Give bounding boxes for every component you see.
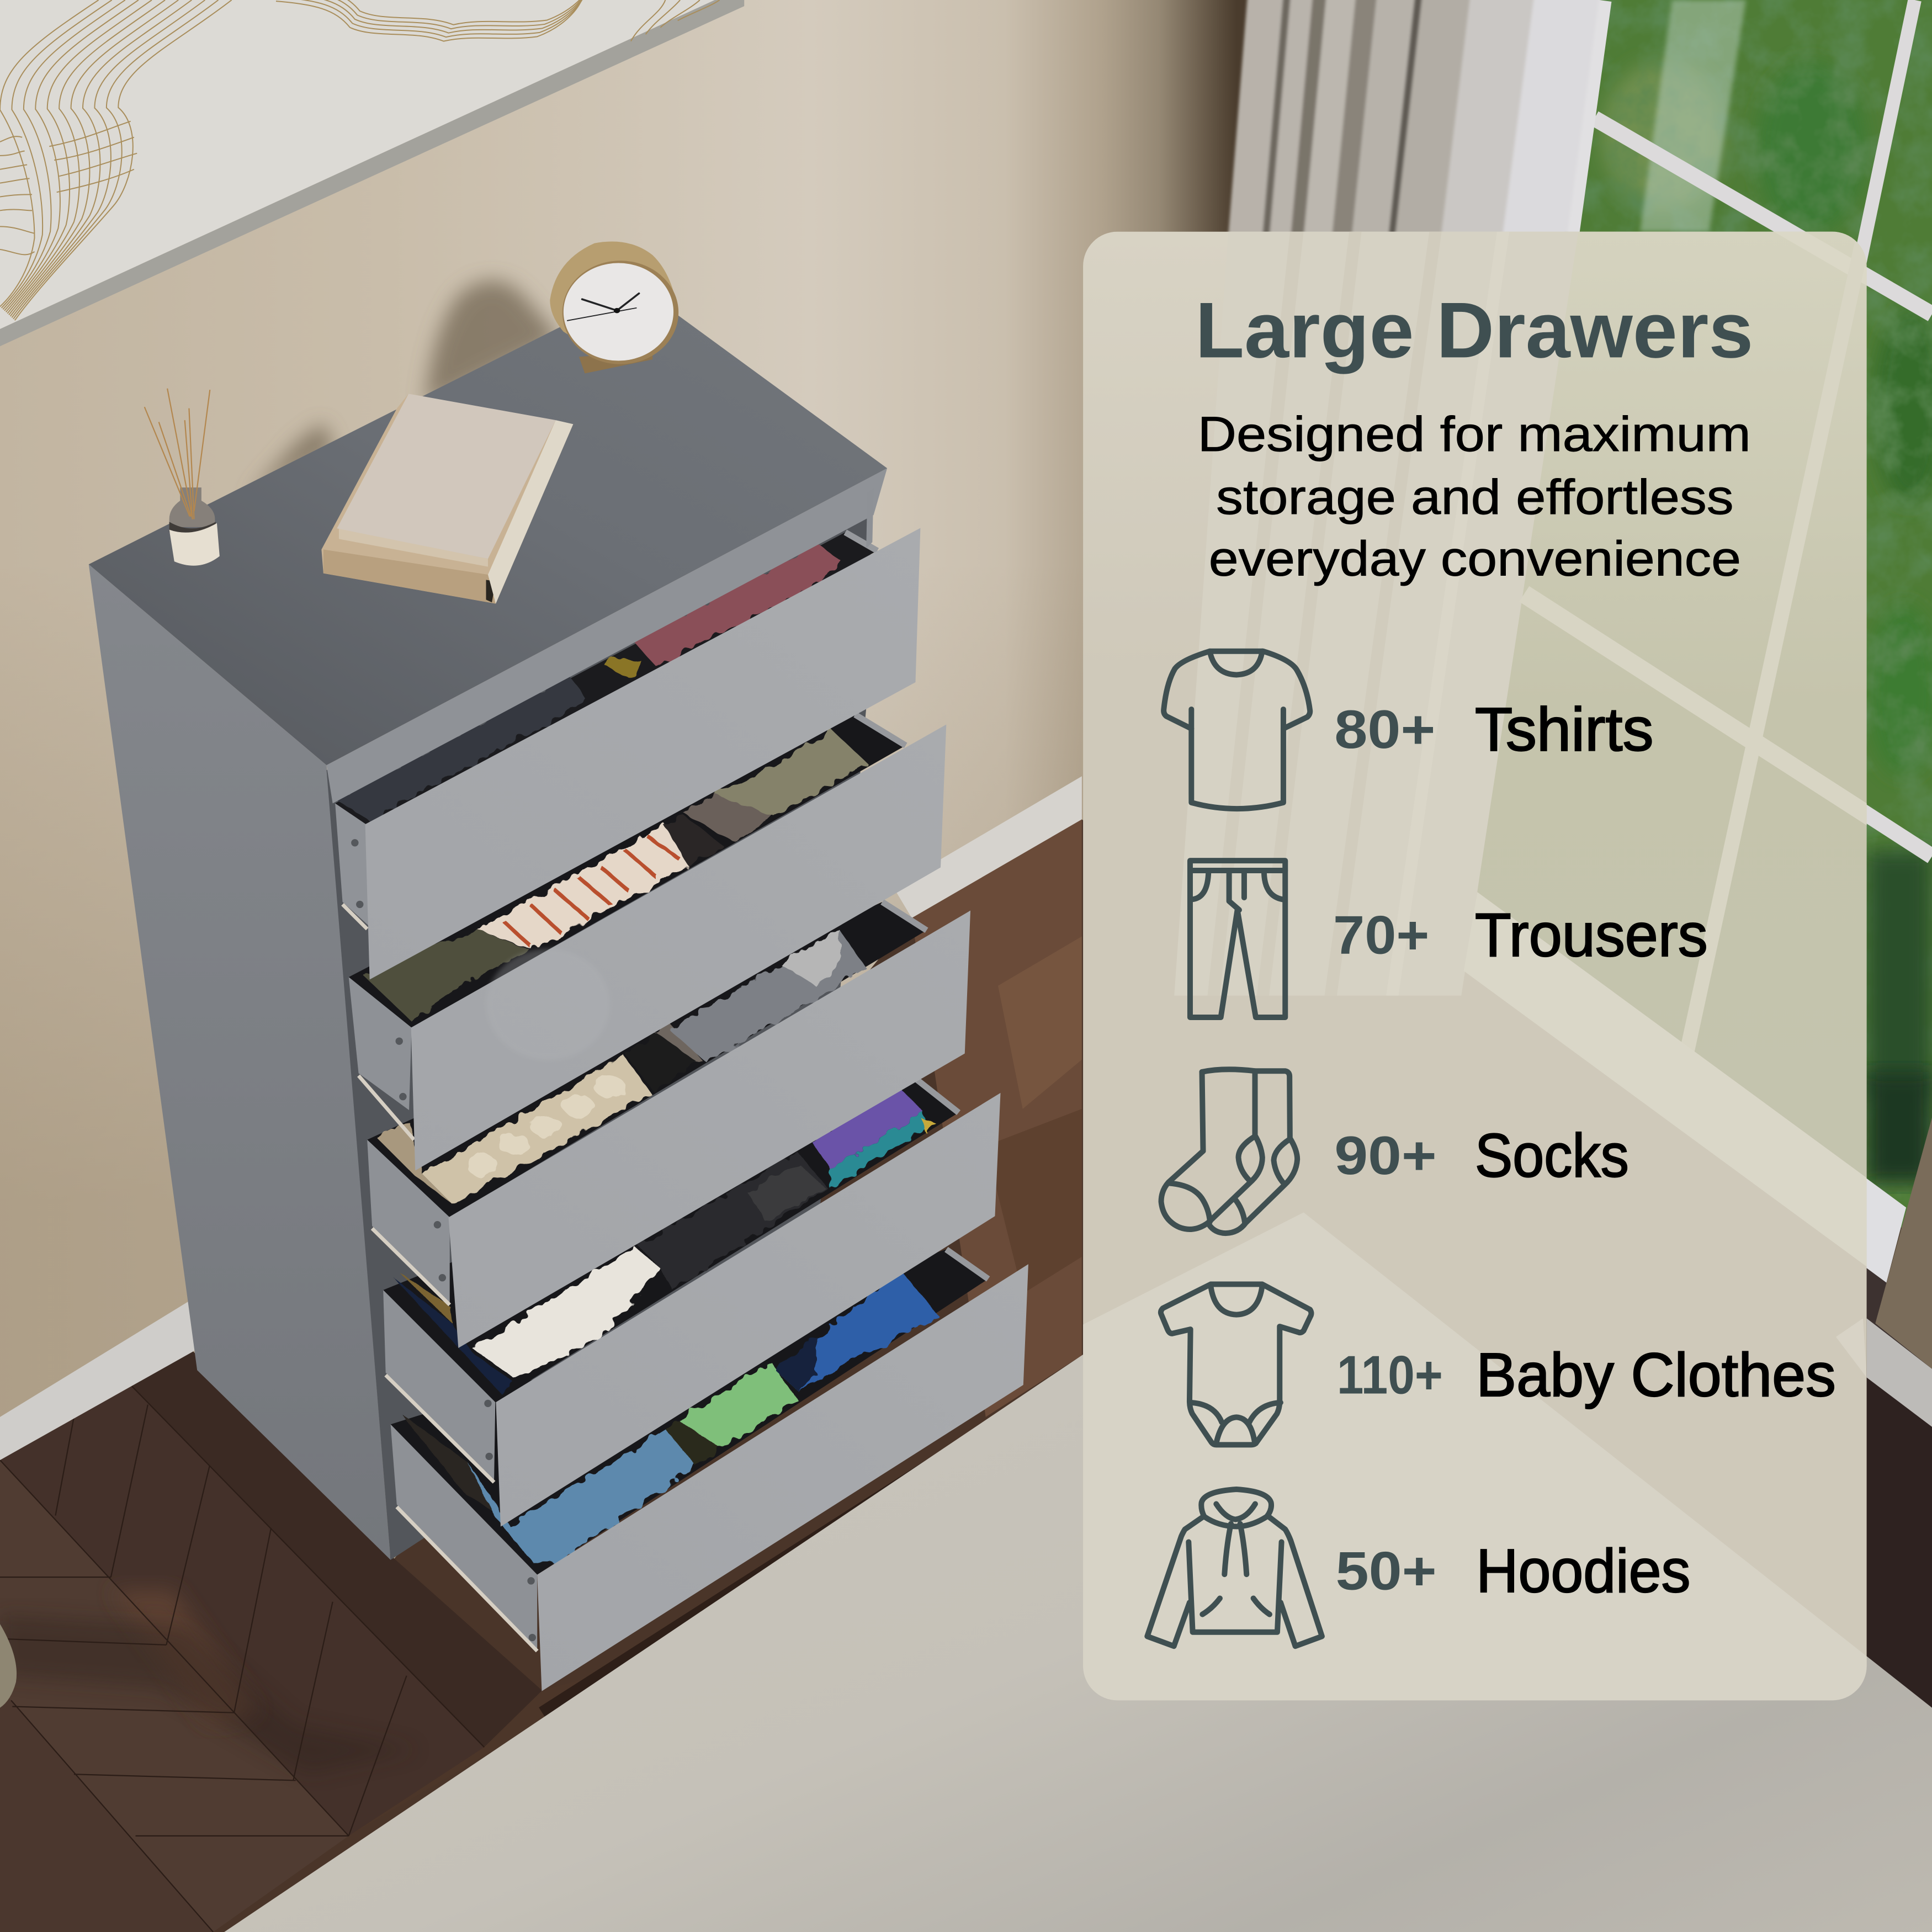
count: socks: 90+ xyxy=(1334,1125,1437,1186)
drawer 3 xyxy=(367,902,970,1348)
clock xyxy=(550,242,678,373)
row: baby clothes xyxy=(1161,1285,1836,1445)
curtain xyxy=(1168,0,1601,986)
info panel xyxy=(1083,232,1867,1700)
row: trousers xyxy=(1190,861,1708,1017)
icon: t-shirt xyxy=(1164,651,1310,809)
lamp base at left edge xyxy=(0,1624,17,1708)
icon: trousers xyxy=(1190,861,1285,1017)
right carcass edge xyxy=(866,488,874,548)
window frame bars xyxy=(1522,0,1932,1072)
icon: socks xyxy=(1161,1069,1297,1233)
label: hoodies: Hoodies xyxy=(1476,1536,1690,1605)
row: tshirts xyxy=(1164,651,1654,809)
icon: baby bodysuit xyxy=(1161,1285,1311,1445)
label: tshirts: Tshirts xyxy=(1475,694,1654,763)
window sill and right wall xyxy=(1464,892,1932,1427)
chest of drawers xyxy=(89,287,1028,1691)
description: everyday convenience xyxy=(1209,530,1741,586)
row: hoodies xyxy=(1147,1489,1690,1646)
books xyxy=(321,394,573,604)
wall art print xyxy=(0,0,744,346)
panel background xyxy=(1083,232,1867,1700)
rug xyxy=(224,1214,1932,1932)
count: baby clothes: 110+ xyxy=(1337,1345,1443,1405)
count: trousers: 70+ xyxy=(1333,905,1429,965)
chest top surface xyxy=(89,287,887,765)
description: Designed for maximum xyxy=(1198,406,1751,461)
title: Large Drawers xyxy=(1195,286,1753,374)
reed diffuser xyxy=(145,389,220,566)
label: baby clothes: Baby Clothes xyxy=(1476,1340,1836,1409)
wall shadows of objects xyxy=(246,280,561,499)
count: tshirts: 80+ xyxy=(1334,699,1435,760)
chest front top rail xyxy=(327,468,887,803)
row: socks xyxy=(1161,1069,1629,1233)
drawer 2 xyxy=(349,715,946,1171)
drawer 1 xyxy=(335,528,920,980)
drawer 4 xyxy=(383,1076,1000,1527)
wood floor xyxy=(0,819,1932,1932)
chest side panel xyxy=(89,564,391,1560)
label: socks: Socks xyxy=(1475,1121,1629,1190)
count: hoodies: 50+ xyxy=(1336,1540,1437,1601)
description: storage and effortless xyxy=(1216,469,1734,524)
window with grass view xyxy=(1580,0,1932,1228)
label: trousers: Trousers xyxy=(1475,900,1708,969)
description xyxy=(1198,406,1751,586)
drawer 5 xyxy=(391,1249,1028,1691)
baseboards xyxy=(0,776,1082,1460)
icon: hoodie xyxy=(1147,1489,1322,1646)
chest carcass front xyxy=(327,493,872,1560)
